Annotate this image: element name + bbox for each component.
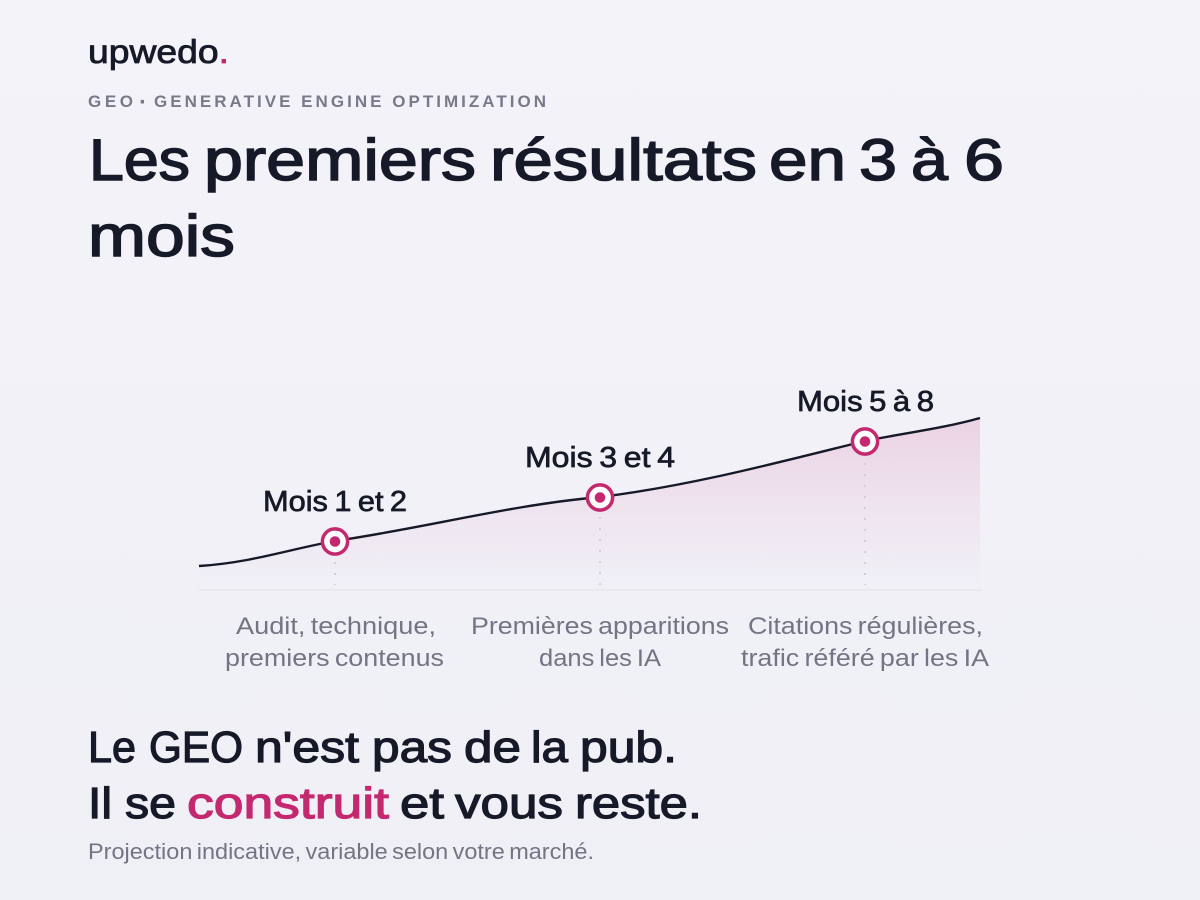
conclusion: et <box>400 779 444 828</box>
conclusion: pub. <box>580 723 677 772</box>
milestone labels: Mois 1 et 2 <box>263 486 407 518</box>
conclusion: pas <box>372 723 452 772</box>
footnote: Projection indicative, variable selon votre marché. <box>88 839 594 864</box>
milestone descriptions: premiers contenus <box>225 645 444 672</box>
dotted guides <box>335 463 865 585</box>
eyebrow: · <box>139 89 147 116</box>
milestone descriptions: Audit, technique, <box>236 613 436 640</box>
growth curve <box>199 418 980 566</box>
conclusion: la <box>531 723 569 772</box>
conclusion: reste. <box>575 779 702 828</box>
eyebrow: GENERATIVE ENGINE OPTIMIZATION <box>154 92 546 111</box>
marker: month 1-2 <box>322 529 348 554</box>
milestone descriptions: Premières apparitions <box>471 613 729 640</box>
conclusion: n'est <box>255 723 359 772</box>
milestone descriptions: dans les IA <box>539 645 661 672</box>
area under curve <box>199 418 980 590</box>
chart: growth timeline <box>199 386 989 672</box>
title: résultats <box>490 128 757 193</box>
milestone descriptions: trafic référé par les IA <box>741 645 989 672</box>
title: mois <box>88 204 235 269</box>
eyebrow: GEO <box>88 92 133 111</box>
title: à <box>911 128 949 193</box>
title <box>88 128 1004 269</box>
logo: upwedo . <box>88 33 229 70</box>
milestone labels: Mois 5 à 8 <box>797 386 934 418</box>
milestone descriptions <box>225 613 989 672</box>
conclusion: vous <box>455 779 563 828</box>
conclusion: de <box>464 723 521 772</box>
title: Les <box>89 128 190 193</box>
milestone labels <box>263 386 934 518</box>
milestone labels: Mois 3 et 4 <box>525 442 675 474</box>
conclusion: GEO <box>149 723 243 772</box>
eyebrow <box>88 89 546 116</box>
conclusion: Il <box>88 779 112 828</box>
conclusion: construit <box>187 779 389 828</box>
conclusion: se <box>125 779 176 828</box>
conclusion <box>88 723 702 828</box>
marker: month 3-4 <box>587 485 613 510</box>
title: premiers <box>204 128 476 193</box>
title: 6 <box>964 128 1004 193</box>
title: en <box>769 128 846 193</box>
title: 3 <box>859 128 897 193</box>
marker: month 5-8 <box>852 429 878 454</box>
milestone descriptions: Citations régulières, <box>748 613 983 640</box>
conclusion: Le <box>88 723 136 772</box>
